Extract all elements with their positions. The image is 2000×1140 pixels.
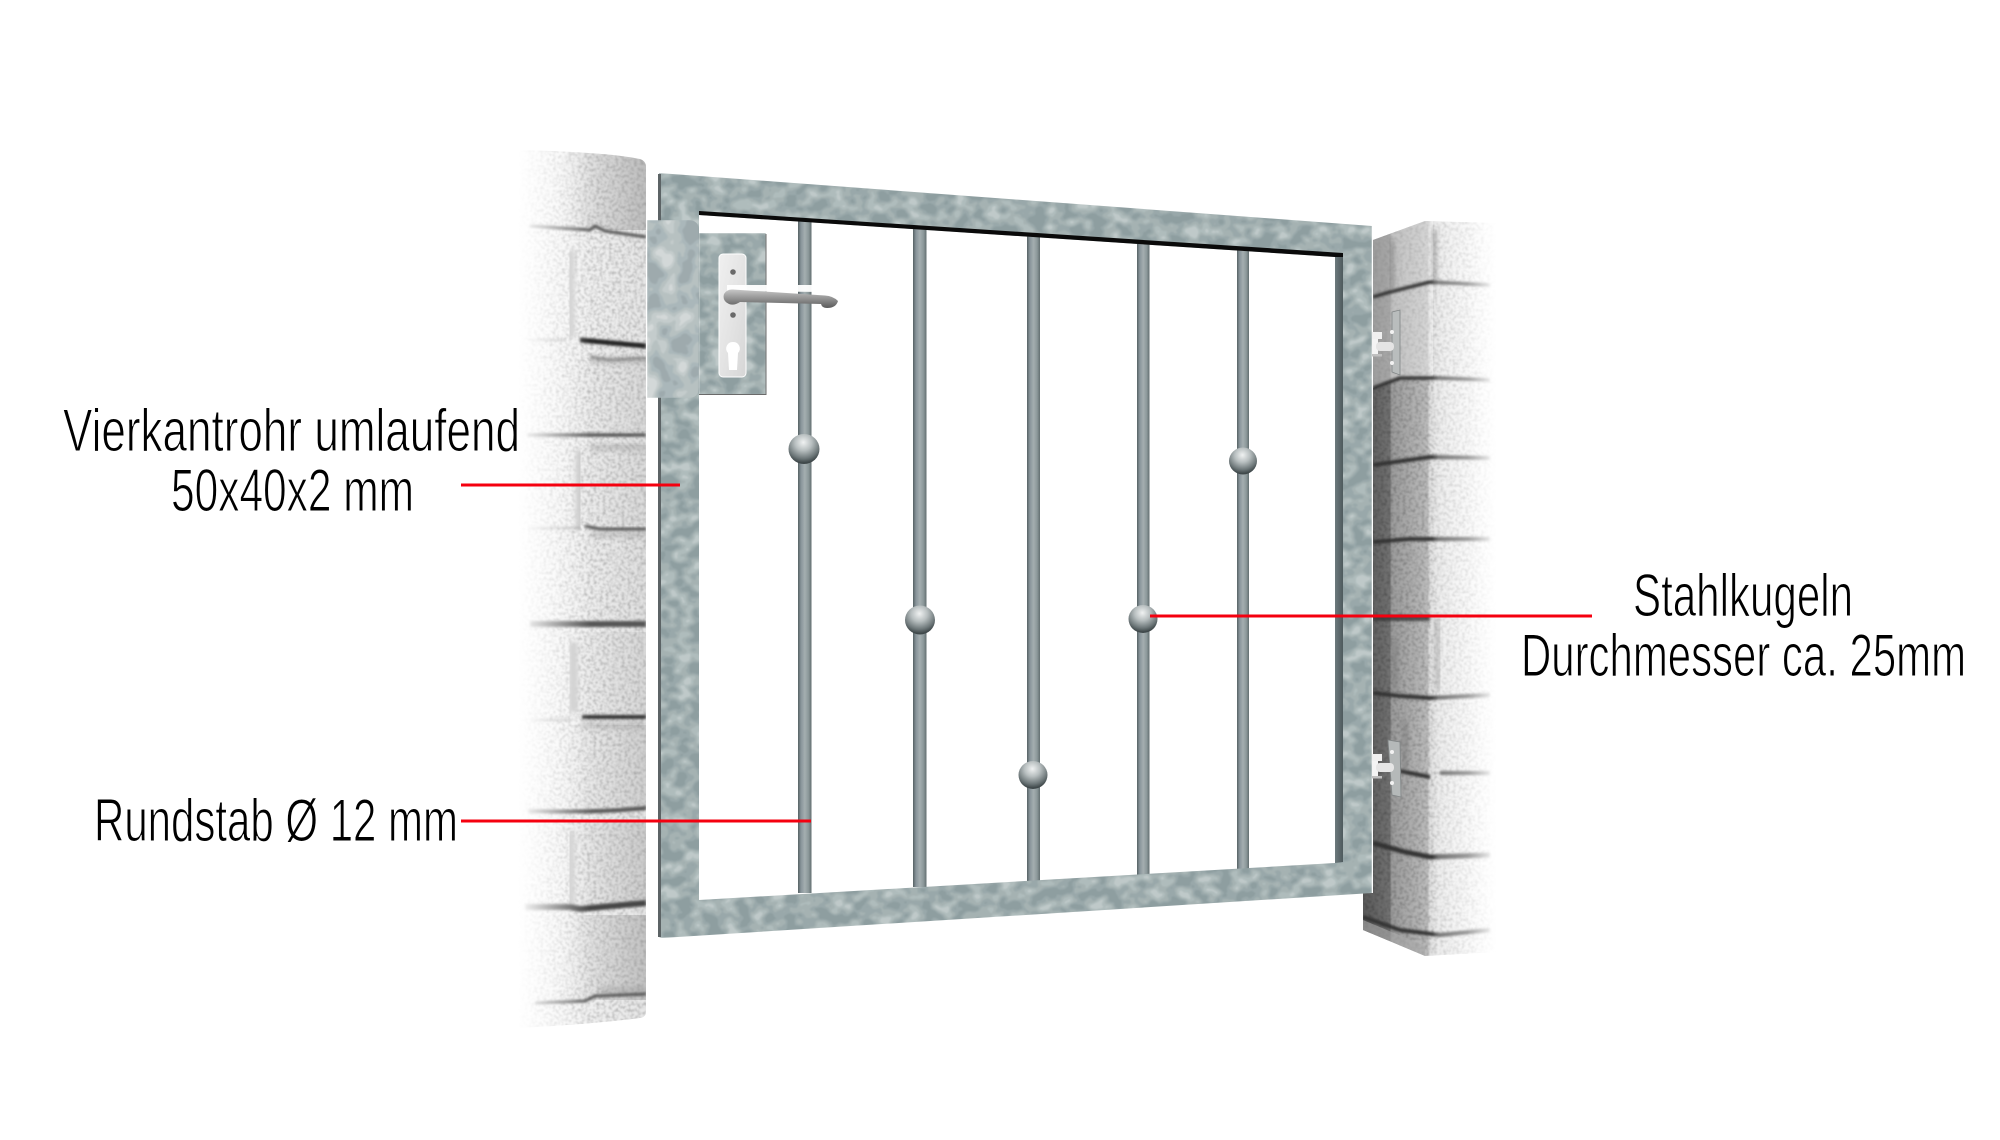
frame left dark edge bbox=[658, 174, 661, 937]
right brick pillar bbox=[1363, 215, 1500, 960]
ball 2 bbox=[905, 606, 935, 634]
icon: upper hinge bbox=[1372, 310, 1400, 375]
label: Rundstab 12 mm: Rundstab Ø 12 mm bbox=[94, 787, 458, 854]
screw top bbox=[730, 269, 736, 275]
label: 50x40x2 mm: 50x40x2 mm bbox=[171, 457, 414, 524]
screw bottom bbox=[730, 312, 736, 318]
bar 1 bbox=[798, 218, 812, 893]
label: Stahlkugeln: Stahlkugeln bbox=[1633, 562, 1853, 629]
label: Vierkantrohr umlaufend: Vierkantrohr umlaufend bbox=[63, 397, 520, 464]
lock plate front on tube bbox=[647, 220, 699, 398]
frame inner top shadow line bbox=[699, 211, 1343, 257]
cylinder cutout bbox=[726, 342, 740, 370]
callout line: Vierkantrohr bbox=[461, 484, 680, 486]
frame inner right face bbox=[1335, 256, 1343, 863]
bar 2 bbox=[913, 226, 926, 887]
ball 4 bbox=[1128, 605, 1158, 633]
ball 1 bbox=[788, 434, 820, 464]
callout line: Rundstab bbox=[461, 820, 811, 822]
steel balls bbox=[788, 434, 1257, 789]
ball 3 bbox=[1018, 761, 1048, 789]
bar 4 bbox=[1137, 242, 1150, 875]
lock plate back bbox=[699, 233, 766, 395]
icon: lower hinge bbox=[1372, 740, 1401, 797]
callout line: Stahlkugeln bbox=[1150, 614, 1592, 618]
door handle lever bbox=[724, 285, 838, 308]
gate bars bbox=[798, 218, 1249, 893]
gate frame square tube bbox=[658, 173, 1372, 938]
left brick pillar bbox=[525, 150, 646, 1026]
bar 5 bbox=[1237, 248, 1249, 870]
bar 3 bbox=[1027, 234, 1040, 881]
ball 5 bbox=[1229, 448, 1257, 474]
door handle escutcheon bbox=[719, 254, 746, 377]
